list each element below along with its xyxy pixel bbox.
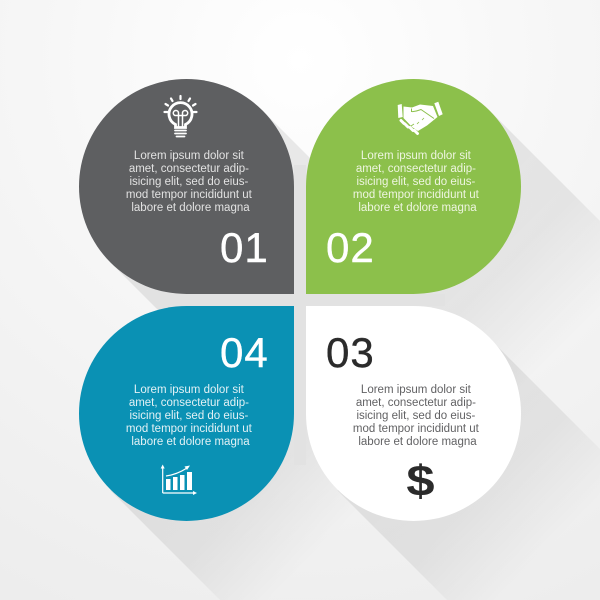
panel 02 text: amet, consectetur adip- (356, 163, 476, 175)
long shadows (110, 110, 600, 600)
panel 01 text: mod tempor incididunt ut (126, 189, 253, 201)
panel 03 text: isicing elit, sed do eius- (356, 410, 476, 422)
number 04: 04 (220, 329, 269, 376)
panel 04: blue petal (79, 306, 294, 521)
number 01: 01 (220, 224, 269, 271)
panel 01: grey petal (79, 79, 294, 294)
number 03: 03 (326, 329, 375, 376)
icon: growth chart (161, 464, 197, 495)
panel 04 text: labore et dolore magna (131, 436, 250, 448)
panel 02 text: isicing elit, sed do eius- (356, 176, 476, 188)
panel 01 text: isicing elit, sed do eius- (129, 176, 249, 188)
panel 03 text: Lorem ipsum dolor sit (361, 384, 472, 396)
panel 03: white petal (306, 306, 521, 521)
icon: dollar sign: $ (406, 457, 435, 506)
panel 02 text: labore et dolore magna (358, 202, 477, 214)
panel 02: green petal (306, 79, 521, 294)
panel 03 text: mod tempor incididunt ut (353, 423, 480, 435)
panel 02 text: mod tempor incididunt ut (353, 189, 480, 201)
number 02: 02 (326, 224, 375, 271)
panel 01 text: Lorem ipsum dolor sit (134, 150, 245, 162)
panel 01 text: labore et dolore magna (131, 202, 250, 214)
panel 03 text: amet, consectetur adip- (356, 397, 476, 409)
panel 03 text: labore et dolore magna (358, 436, 477, 448)
panel 04 text: mod tempor incididunt ut (126, 423, 253, 435)
panel 04 text: isicing elit, sed do eius- (129, 410, 249, 422)
panel 02 text: Lorem ipsum dolor sit (361, 150, 472, 162)
panel 04 text: Lorem ipsum dolor sit (134, 384, 245, 396)
panel 04 text: amet, consectetur adip- (129, 397, 249, 409)
panel 01 text: amet, consectetur adip- (129, 163, 249, 175)
icon: light bulb (164, 96, 196, 136)
icon: handshake (398, 102, 443, 134)
